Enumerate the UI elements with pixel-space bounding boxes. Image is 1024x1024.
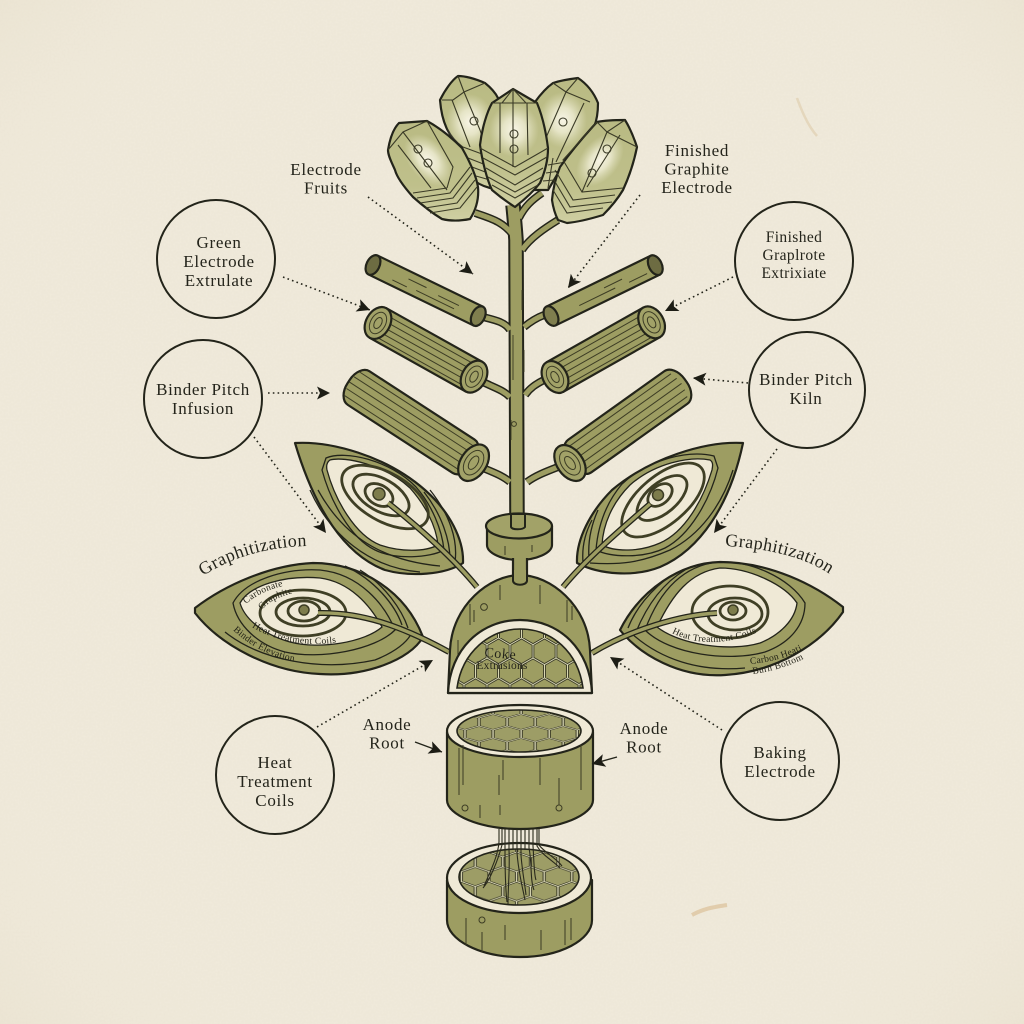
leaf: lower right: Burn Bottom [752,655,804,674]
dome micro text: Coke [484,646,517,663]
callout: Green Electrode Extrulate: Extrulate [185,271,253,290]
callout: Binder Pitch Infusion [144,340,262,458]
logs: right column [536,253,697,487]
leaf: lower right: Carbon Heating [750,644,801,664]
arrow: binder kiln to log [693,378,748,383]
callout: Binder Pitch Kiln: Kiln [789,389,823,408]
label: Graphitization left: Graphitization [199,536,306,574]
label: Electrode Fruits: Fruits [304,178,348,198]
arrow: finished graphite to log [568,195,640,288]
callout: Heat Treatment Coils: Treatment [237,772,313,791]
label: Electrode Fruits: Electrode [290,160,362,179]
log: large right [548,364,697,487]
arrow: binder infusion to leaf [254,437,326,533]
log: middle left [359,302,493,397]
callout: Green Electrode Extrulate [157,200,275,318]
label: Finished Graphite Electrode: Finished [665,141,729,160]
callout: Heat Treatment Coils: Coils [255,791,295,810]
coke dome: Extrusions [476,660,528,672]
callout: Heat Treatment Coils: Heat [258,753,292,772]
leaf micro text: Heat Treatment Coils [672,628,756,642]
electrode fruits cluster [388,76,637,223]
arrow: heat coils to dome [317,660,433,727]
leaf: lower left [194,562,449,676]
label: Anode Root right: Anode [620,719,668,738]
neck below collar [513,558,527,585]
leaf: upper right [563,443,743,587]
callout: Baking Electrode: Baking [753,743,807,762]
plant stem and branches [475,193,558,520]
label: Anode Root left: Root [369,734,405,752]
callout: Baking Electrode [721,702,839,820]
leaf: lower left: Binder Elevation [233,626,294,660]
fruit: back left [440,76,505,188]
callout: Binder Pitch Infusion: Infusion [172,399,234,418]
callout: Heat Treatment Coils [216,716,334,834]
collar disc on stem [486,514,552,560]
leaf: lower left: Graphite [258,589,292,608]
fruit: outer left [388,121,478,220]
callout: Baking Electrode: Electrode [744,762,816,781]
callout: Green Electrode Extrulate: Green [196,233,242,252]
arrow: binder kiln to leaf [714,449,777,533]
anode root upper cylinder [447,705,593,829]
log: middle right [536,302,670,398]
arrow: baking electrode to dome [610,657,722,730]
arrow: anode root right [592,757,617,764]
callout: Finished Graplrote Extrulate: Finished [766,229,822,246]
callout: Finished Graplrote Extrulate [735,202,853,320]
label: Anode Root right: Root [626,738,662,756]
leaf: lower left: Carbonate [243,582,282,603]
label: Finished Graphite Electrode: Graphite [664,160,730,178]
log: green thin left [363,253,489,328]
callout: Green Electrode Extrulate: Electrode [183,252,255,271]
anode root lower cylinder [447,843,592,957]
callout: Finished Graplrote Extrulate: Extrixiate [761,265,827,282]
arrow: binder infusion to log [268,392,330,394]
fruit: outer right [552,120,637,223]
label: Finished Graphite Electrode: Electrode [661,178,733,197]
leaf: lower right [591,560,844,676]
logs: left column [338,253,495,487]
label: Graphitization right: Graphitization [726,534,832,574]
root fibres [483,829,562,904]
fruit: back right [525,78,598,190]
arrows: dotted leader lines [254,195,777,764]
coke dome [448,570,592,693]
arrow: electrode fruits to log [368,197,473,274]
fruit: center [480,89,548,207]
label: Anode Root left: Anode [363,715,411,734]
log: large left [338,365,495,487]
callout: Binder Pitch Kiln [749,332,865,448]
callout: Binder Pitch Kiln: Binder Pitch [759,370,853,389]
arrow: green extrulate to log [283,277,370,310]
callout: Finished Graplrote Extrulate: Graplrote [762,247,826,264]
arrow: anode root left [415,742,442,752]
leaf micro text: Heat Treatment Coils [252,622,336,644]
callout: Binder Pitch Infusion: Binder Pitch [156,380,250,399]
log: thin right [541,253,666,328]
leaf: upper left [295,443,477,587]
arrow: finished extrulate to log [665,277,733,311]
